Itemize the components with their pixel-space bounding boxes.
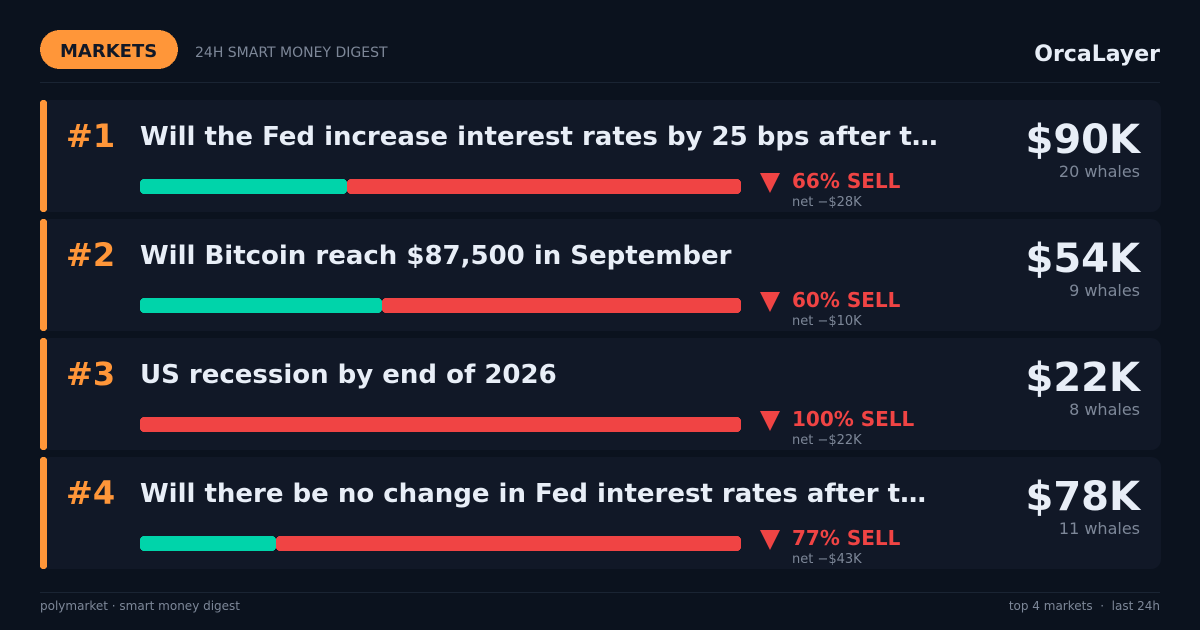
icon: down triangle 3 [760, 411, 780, 431]
net flow 2: net −$10K [792, 314, 862, 329]
icon: down triangle 2 [760, 292, 780, 312]
footer right: top 4 markets · last 24h [1009, 599, 1160, 613]
icon: down triangle 1 [760, 173, 780, 193]
sell percent 3: 100% SELL [792, 407, 915, 431]
market title 4: Will there be no change in Fed interest rates after t… [140, 479, 926, 509]
badge: MARKETS: MARKETS [60, 41, 157, 62]
net flow 1: net −$28K [792, 195, 862, 210]
rank 1: #1 [66, 117, 115, 155]
net flow 4: net −$43K [792, 552, 862, 567]
market title 2: Will Bitcoin reach $87,500 in September [140, 241, 732, 271]
whales 2: 9 whales [1069, 281, 1140, 300]
buy sell bar 4 [140, 536, 741, 551]
net flow 3: net −$22K [792, 433, 862, 448]
market title 3: US recession by end of 2026 [140, 360, 557, 390]
buy sell bar 3 [140, 417, 741, 432]
brand: OrcaLayer [1034, 42, 1160, 67]
footer left: polymarket · smart money digest [40, 599, 240, 613]
sell percent 4: 77% SELL [792, 526, 901, 550]
panel: market 3 [40, 338, 1161, 450]
whales 1: 20 whales [1059, 162, 1140, 181]
panel: market 1 [40, 100, 1161, 212]
amount 2: $54K [1026, 236, 1142, 282]
panel: market 2 [40, 219, 1161, 331]
badge: MARKETS [40, 30, 178, 69]
buy sell bar 1 [140, 179, 741, 194]
amount 3: $22K [1026, 355, 1142, 401]
panel: market 4 [40, 457, 1161, 569]
rank 4: #4 [66, 474, 115, 512]
buy sell bar 2 [140, 298, 741, 313]
subtitle: 24H SMART MONEY DIGEST [195, 45, 388, 61]
whales 4: 11 whales [1059, 519, 1140, 538]
amount 4: $78K [1026, 474, 1142, 520]
market title 1: Will the Fed increase interest rates by 25 bps after t… [140, 122, 938, 152]
sell percent 2: 60% SELL [792, 288, 901, 312]
icon: down triangle 4 [760, 530, 780, 550]
whales 3: 8 whales [1069, 400, 1140, 419]
header [40, 30, 1160, 69]
rank 2: #2 [66, 236, 115, 274]
amount 1: $90K [1026, 117, 1142, 163]
sell percent 1: 66% SELL [792, 169, 901, 193]
rank 3: #3 [66, 355, 115, 393]
